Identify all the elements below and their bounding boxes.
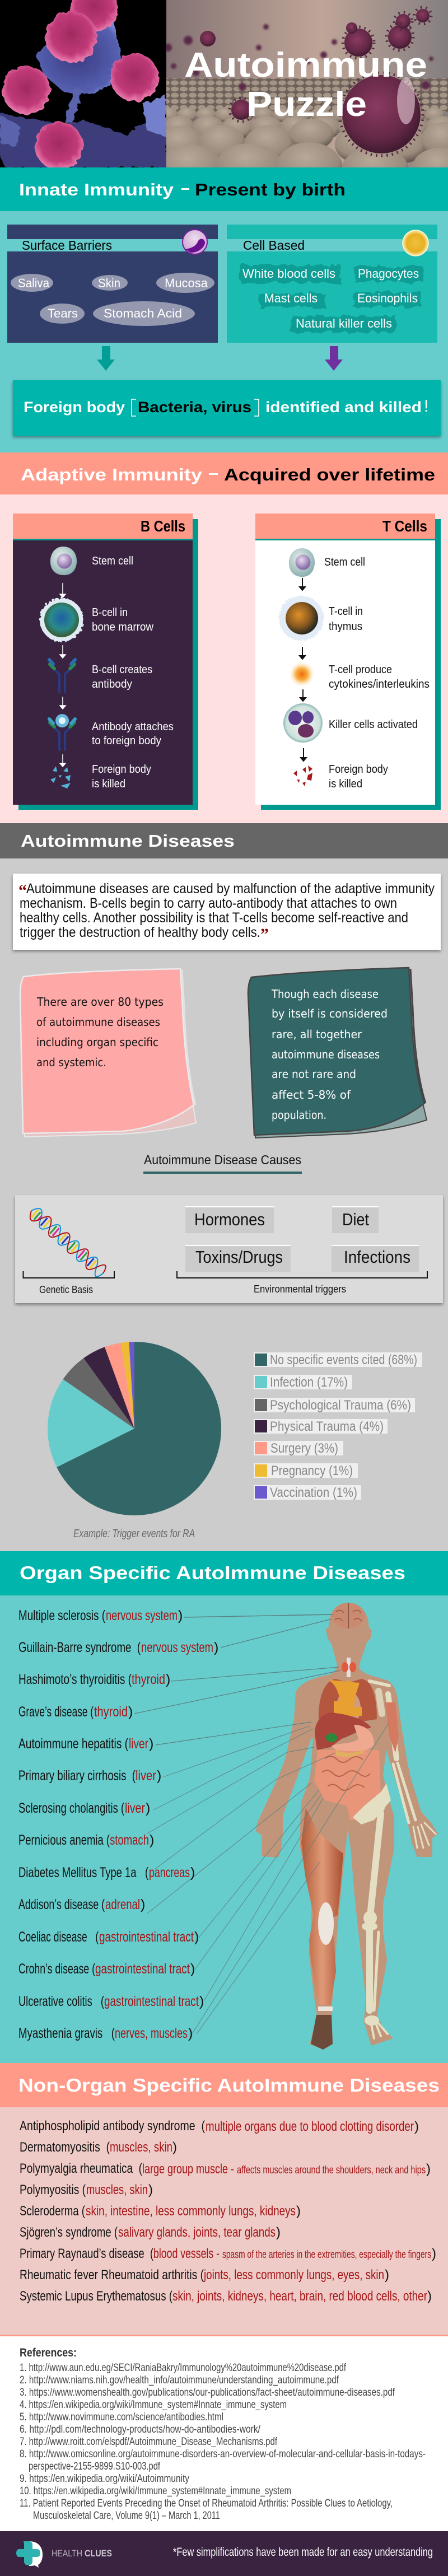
foot muscle <box>311 2015 333 2050</box>
chart caption: Example: Trigger events for RA <box>73 1528 195 1540</box>
legend: Psychological Trauma (6%) <box>270 1398 411 1413</box>
references: 4. https://en.wikipedia.org/wiki/Immune_system#Innate_immune_system <box>20 2399 287 2411</box>
organ: liver <box>315 1712 371 1750</box>
arm muscle <box>385 1702 399 1753</box>
logo: health clues <box>16 2541 112 2568</box>
organ: brain <box>332 1603 365 1628</box>
b cell step labels: B-cell creates <box>92 664 152 676</box>
references: 6. http://pdl.com/technology-products/how-do-antibodies-work/ <box>20 2424 261 2435</box>
organ-specific disease list: liver <box>125 1800 145 1816</box>
legend: Physical Trauma (4%) <box>270 1419 384 1434</box>
non-organ disease list: ) <box>296 2204 301 2219</box>
logo: health clues: CLUES <box>85 2548 112 2559</box>
body silhouette <box>256 1603 438 2050</box>
note: over 80 types: of autoimmune diseases <box>36 1015 160 1029</box>
organ-specific disease list: ) <box>150 1832 154 1848</box>
organ-specific disease list: adrenal <box>105 1897 140 1912</box>
non-organ disease list: ) <box>426 2162 431 2177</box>
icon: killer cell <box>283 703 323 743</box>
references: References: <box>20 2346 77 2359</box>
note: rare but common together: by itself is considered <box>272 1007 388 1020</box>
non-organ disease list: ) <box>414 2119 419 2134</box>
references: 10. https://en.wikipedia.org/wiki/Immune_system#Innate_immune_system <box>20 2485 291 2497</box>
note: rare but common together: rare, all together <box>272 1028 362 1041</box>
note: over 80 types: and systemic. <box>36 1056 106 1069</box>
organ-specific disease list: Myasthenia gravis ( <box>18 2026 115 2041</box>
icon: antibody attached to foreign body <box>49 714 75 750</box>
icon: stem cell <box>289 548 315 577</box>
leg muscle <box>301 1808 343 2005</box>
organ-specific disease list: ) <box>199 1994 204 2009</box>
note: over 80 types <box>20 969 196 1137</box>
cell type labels <box>240 265 423 333</box>
b cell step labels: to foreign body <box>92 735 161 747</box>
title <box>184 46 427 124</box>
arrow: purple down <box>325 346 343 371</box>
text block: definition quote: “ <box>18 881 27 900</box>
organ-specific disease list: pancreas <box>149 1865 190 1880</box>
organ-specific disease list: ) <box>157 1768 161 1784</box>
t cell step labels: cytokines/interleukins <box>329 678 430 690</box>
heading: adaptive immunity <box>0 452 448 494</box>
organ-specific disease list: nervous system <box>106 1608 178 1623</box>
organ-specific disease list <box>18 1608 218 2041</box>
b cell step labels: Antibody attaches <box>92 721 174 733</box>
non-organ disease list: joints, less commonly lungs, eyes, skin <box>203 2267 384 2283</box>
heading: innate immunity: Present by birth <box>195 180 346 199</box>
skeleton: right arm and leg <box>370 1681 436 2038</box>
organ-specific disease list: ) <box>166 1672 170 1687</box>
legend: No specific events cited (68%) <box>270 1352 417 1368</box>
non-organ disease list: ) <box>432 2246 436 2261</box>
section background: non-organ specific <box>0 2107 448 2335</box>
icon: killed foreign body <box>293 766 312 786</box>
cell type labels: White blood cells <box>242 267 335 281</box>
text block: definition quote: trigger the destruction of healthy body cells. <box>20 925 260 940</box>
organ: pancreas <box>336 1750 364 1757</box>
t cell step labels <box>324 556 430 790</box>
legend: Surgery (3%) <box>270 1441 338 1456</box>
organ-specific disease list: thyroid <box>132 1672 165 1687</box>
non-organ disease list: skin, intestine, less commonly lungs, kidneys <box>86 2204 296 2219</box>
organ-specific disease list: Hashimoto’s thyroiditis ( <box>18 1672 132 1687</box>
organ-specific disease list: gastrointestinal tract <box>99 1929 194 1945</box>
cell type labels: Eosinophils <box>357 291 418 305</box>
knee tendon <box>318 1902 334 1945</box>
heading: organ specific autoimmune diseases: Organ Specific AutoImmune Diseases <box>20 1562 405 1583</box>
callout: foreign body identified and killed: ! <box>424 397 428 416</box>
organ-specific disease list: ) <box>128 1704 133 1720</box>
non-organ disease list: Scleroderma ( <box>20 2204 85 2219</box>
legend: Vaccination (1%) <box>270 1485 357 1500</box>
ankle <box>318 2006 333 2011</box>
organ-specific disease list: Ulcerative colitis ( <box>18 1994 104 2009</box>
trigger chips: Hormones <box>194 1210 265 1229</box>
panel: causes: Genetic Basis <box>39 1284 93 1295</box>
section background: autoimmune diseases <box>0 858 448 1551</box>
panel: T cells <box>255 514 441 810</box>
non-organ disease list: Dermatomyositis ( <box>20 2140 110 2155</box>
organ-specific disease list: gastrointestinal tract <box>104 1994 199 2009</box>
organ-specific disease list: ) <box>141 1897 145 1912</box>
organ-specific disease list: ) <box>214 1640 218 1655</box>
footer <box>0 2531 448 2576</box>
organ-specific disease list: Grave’s disease ( <box>18 1704 94 1720</box>
non-organ disease list: ) <box>276 2225 281 2240</box>
note: over 80 types: There are over 80 types <box>36 995 164 1009</box>
non-organ disease list: ) <box>172 2140 177 2155</box>
pie chart: trigger events for RA <box>48 1342 221 1515</box>
t cell step labels: T-cell in <box>329 605 363 618</box>
organ-specific disease list: Primary biliary cirrhosis ( <box>18 1768 136 1784</box>
organ-specific disease list: nerves, muscles <box>115 2026 188 2041</box>
organ-specific disease list: liver <box>129 1736 148 1752</box>
arrows: t cell sequence <box>300 578 306 761</box>
title: Puzzle <box>246 85 367 124</box>
non-organ disease list: Polymyositis ( <box>20 2182 86 2197</box>
text block: definition quote: ” <box>260 925 269 944</box>
t cell step labels: thymus <box>329 620 362 633</box>
organ-specific disease list: Diabetes Mellitus Type 1a ( <box>18 1865 148 1880</box>
callout: foreign body identified and killed: identified and killed <box>265 399 422 416</box>
heading: adaptive immunity: Adaptive Immunity <box>21 465 203 484</box>
panel: causes: Environmental triggers <box>254 1284 346 1295</box>
t cell step labels: Stem cell <box>324 556 365 568</box>
b cell step labels: bone marrow <box>92 621 154 633</box>
panel: B cells <box>13 514 198 810</box>
non-organ disease list: Sjögren’s syndrome ( <box>20 2225 118 2240</box>
heading: autoimmune disease causes <box>143 1152 302 1174</box>
references: perspective-2155-9899.S10-003.pdf <box>29 2461 161 2472</box>
arrows: b cell sequence <box>60 583 66 767</box>
organ-specific disease list: ) <box>178 1608 183 1623</box>
hero image: right virus over cell surface <box>166 0 448 167</box>
trigger chips: Toxins/Drugs <box>195 1247 283 1267</box>
b cell step labels: is killed <box>92 778 125 790</box>
callout: foreign body identified and killed: Bacteria, virus <box>138 399 251 416</box>
illustration: human body with organs <box>256 1603 438 2050</box>
icon: stem cell <box>50 547 77 575</box>
heading: adaptive immunity: Acquired over lifetime <box>224 465 435 484</box>
heading: autoimmune diseases: Autoimmune Diseases <box>21 831 235 851</box>
icon: t-cell <box>279 596 324 641</box>
panel: B cells: B Cells <box>141 517 185 535</box>
references: 1. http://www.aun.edu.eg/SECI/RaniaBakry/Immunology%20autoimmune%20disease.pdf <box>20 2362 347 2374</box>
organ-specific disease list: Addison’s disease ( <box>18 1897 105 1912</box>
barrier labels: Stomach Acid <box>104 306 182 320</box>
icon: b-cell <box>40 598 83 642</box>
organ-specific disease list: Coeliac disease ( <box>18 1929 99 1945</box>
non-organ disease list <box>20 2118 436 2304</box>
b cell step labels <box>92 555 174 790</box>
t cell step labels: is killed <box>329 778 362 790</box>
non-organ disease list: ) <box>427 2289 432 2304</box>
non-organ disease list: Systemic Lupus Erythematosus ( <box>20 2289 172 2304</box>
panel: causes <box>15 1195 443 1303</box>
organ-specific disease list: ) <box>194 1929 199 1945</box>
section background: adaptive immunity <box>0 494 448 823</box>
cell type labels: Natural killer cells <box>296 316 392 330</box>
legend: Pregnancy (1%) <box>271 1463 353 1478</box>
organ: thyroid <box>342 1658 356 1677</box>
heading: autoimmune disease causes: Autoimmune Disease Causes <box>144 1152 301 1167</box>
heading: non-organ specific autoimmune diseases: Non-Organ Specific AutoImmune Diseases <box>18 2075 440 2096</box>
section background: organ specific <box>0 1595 448 2063</box>
non-organ disease list: ) <box>385 2267 389 2283</box>
note: over 80 types: including organ specific <box>36 1035 158 1049</box>
cell type labels: Mast cells <box>264 291 318 305</box>
callout: foreign body identified and killed: Foreign body <box>24 399 125 416</box>
references: 7. http://www.roitt.com/elspdf/Autoimmune_Disease_Mechanisms.pdf <box>20 2436 278 2448</box>
heading: innate immunity <box>0 167 448 211</box>
organ: lungs <box>319 1679 377 1722</box>
note: rare but common together: are not rare and <box>272 1067 356 1081</box>
organ-specific disease list: ) <box>190 1961 195 1977</box>
organ-specific disease list: nervous system <box>141 1640 213 1655</box>
icon: antibody <box>49 660 75 692</box>
note: rare but common together: population. <box>272 1108 326 1122</box>
barrier labels: Saliva <box>18 276 50 290</box>
barrier labels <box>11 273 214 326</box>
note: rare but common together <box>248 968 427 1138</box>
icon: DNA helix <box>26 1205 108 1278</box>
non-organ disease list: Antiphospholipid antibody syndrome ( <box>20 2118 205 2134</box>
trigger chips: Diet <box>342 1210 369 1229</box>
references: Musculoskeletal Care, Volume 9(1) – March 1, 2011 <box>33 2510 220 2522</box>
organ-specific disease list: ) <box>190 1865 195 1880</box>
t cell step labels: Killer cells activated <box>329 718 418 731</box>
section background: innate immunity <box>0 211 448 452</box>
t cell step labels: Foreign body <box>329 763 388 776</box>
references: 5. http://www.novimmune.com/science/antibodies.html <box>20 2411 223 2423</box>
panel: cell based <box>227 225 437 343</box>
text block: definition quote: mechanism. B-cells begin to carry auto-antibody that attaches to own <box>20 895 397 911</box>
organ-specific disease list: Pernicious anemia ( <box>18 1832 110 1848</box>
icon: cytokines <box>288 661 315 688</box>
leader lines <box>134 1614 389 2034</box>
legend: Infection (17%) <box>270 1375 348 1390</box>
organ-specific disease list: ) <box>146 1800 150 1816</box>
non-organ disease list: ) <box>148 2182 153 2197</box>
heading: innate immunity: Innate Immunity <box>19 180 174 199</box>
b cell step labels: Foreign body <box>92 763 151 776</box>
organ-specific disease list: ) <box>149 1736 153 1752</box>
non-organ disease list: Primary Raynaud’s disease ( <box>20 2246 153 2261</box>
organ-specific disease list: Crohn’s disease ( <box>18 1961 95 1977</box>
non-organ disease list: large group muscle - <box>142 2162 234 2177</box>
organ: aorta <box>330 1680 361 1715</box>
icon: purple cell <box>183 230 207 254</box>
barrier labels: Mucosa <box>165 276 208 290</box>
heading: organ specific autoimmune diseases <box>0 1551 448 1595</box>
b cell step labels: antibody <box>92 678 132 690</box>
barrier labels: Tears <box>48 306 78 320</box>
trigger chips <box>185 1206 419 1272</box>
organ: gallbladder <box>326 1733 337 1742</box>
organ-specific disease list: Multiple sclerosis ( <box>18 1608 106 1623</box>
heading: non-organ specific autoimmune diseases <box>0 2063 448 2107</box>
callout: foreign body identified and killed <box>13 380 441 436</box>
non-organ disease list: blood vessels - <box>153 2246 220 2261</box>
note: rare but common together: autoimmune diseases <box>272 1048 380 1061</box>
non-organ disease list: Rheumatic fever Rheumatoid arthritis ( <box>20 2267 204 2283</box>
non-organ disease list: muscles, skin <box>110 2140 172 2155</box>
non-organ disease list: salivary glands, joints, tear glands <box>118 2225 276 2240</box>
b cell step labels: Stem cell <box>92 555 133 567</box>
organ: intestines <box>314 1750 381 1820</box>
icon: yellow cell <box>403 230 428 256</box>
heading: autoimmune diseases <box>0 823 448 858</box>
organ-specific disease list: gastrointestinal tract <box>95 1961 190 1977</box>
trigger chips: Infections <box>344 1247 410 1267</box>
legend <box>254 1352 422 1500</box>
logo: health clues: HEALTH <box>52 2548 82 2559</box>
icon: killed foreign body <box>50 766 71 788</box>
organ-specific disease list: ) <box>188 2026 193 2041</box>
title: Autoimmune <box>184 46 427 85</box>
organ-specific disease list: Autoimmune hepatitis ( <box>18 1736 129 1752</box>
organ-specific disease list: Sclerosing cholangitis ( <box>18 1800 124 1816</box>
organ-specific disease list: stomach <box>110 1832 149 1848</box>
barrier labels: Skin <box>98 276 120 290</box>
divider band <box>0 2335 448 2336</box>
references: 2. http://www.niams.nih.gov/health_info/autoimmune/understanding_autoimmune.pdf <box>20 2374 339 2386</box>
non-organ disease list: Polymyalgia rheumatica ( <box>20 2161 142 2176</box>
panel: T cells: T Cells <box>382 517 427 535</box>
skeleton: pelvis, knee and foot bones <box>353 1784 391 2026</box>
references: 9. https://en.wikipedia.org/wiki/Autoimmunity <box>20 2473 189 2485</box>
note: rare but common together: affect 5-8% of <box>272 1088 351 1102</box>
text block: definition quote <box>13 874 441 950</box>
b cell step labels: B-cell in <box>92 606 128 619</box>
cell type labels: Phagocytes <box>358 267 419 281</box>
panel: surface barriers: Surface Barriers <box>22 238 112 253</box>
t cell step labels: T-cell produce <box>329 664 392 676</box>
organ: heart <box>336 1691 361 1725</box>
note: rare but common together: Though each disease <box>271 987 379 1001</box>
panel: surface barriers <box>7 225 218 343</box>
hero image: left microscopy of immune cells <box>0 0 166 170</box>
non-organ disease list: muscles, skin <box>86 2182 148 2197</box>
organ-specific disease list: Guillain-Barre syndrome ( <box>18 1640 141 1655</box>
organ-specific disease list: thyroid <box>94 1704 128 1720</box>
arrow: teal down <box>97 346 115 371</box>
organ: stomach <box>332 1725 374 1751</box>
references <box>20 2346 426 2522</box>
organ-specific disease list: liver <box>136 1768 156 1784</box>
panel: cell based: Cell Based <box>243 238 305 253</box>
